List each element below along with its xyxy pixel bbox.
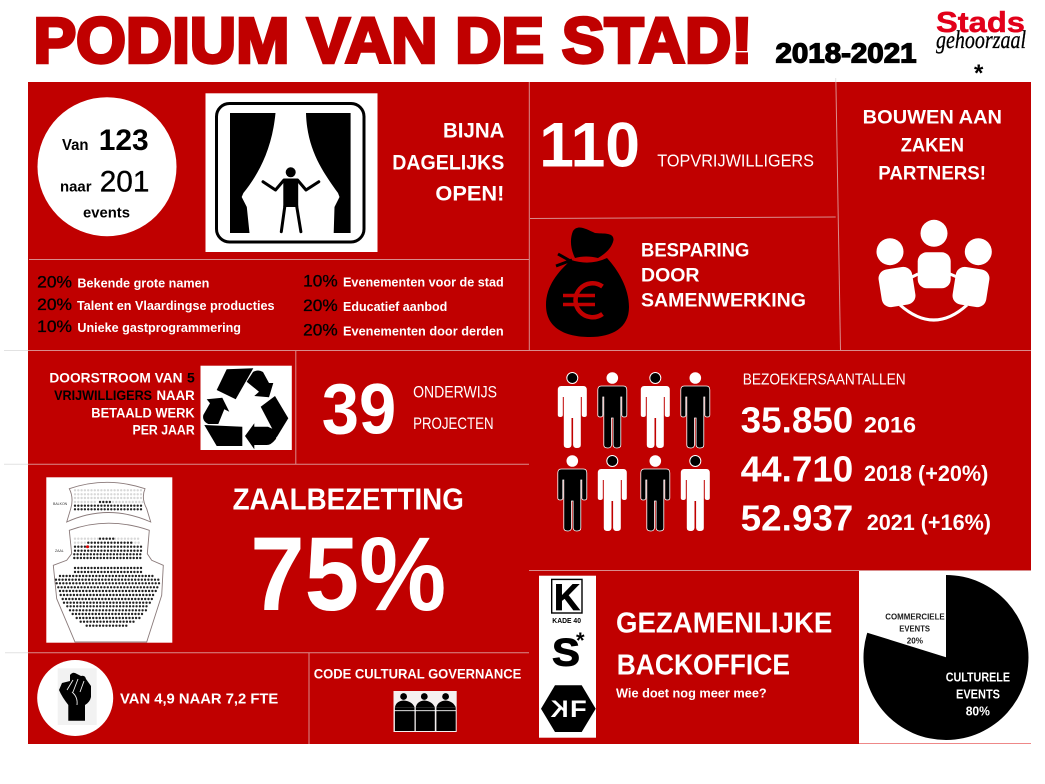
seating plan: BALKON [53, 502, 68, 506]
panel: pie chart events: 20% [907, 635, 923, 645]
panel: onderwijsprojecten: PROJECTEN [413, 414, 494, 433]
panel: programme mix: Educatief aanbod [343, 300, 447, 314]
panel: gezamenlijke backoffice: GEZAMENLIJKE [616, 608, 832, 640]
partner logos: K [550, 696, 568, 723]
partner logos: S [552, 631, 580, 674]
panel: zaalbezetting: ZAALBEZETTING [233, 481, 464, 516]
seating plan [46, 477, 172, 643]
events circle: naar [60, 179, 92, 196]
panel: besparing door samenwerking: SAMENWERKING [641, 290, 806, 312]
panel: onderwijsprojecten: ONDERWIJS [413, 382, 497, 401]
logo: Stadsgehoorzaal: Stads [936, 7, 1025, 39]
partner logos: F [570, 696, 587, 723]
panel: doorstroom vrijwilligers: VRIJWILLIGERS [54, 387, 152, 403]
panel: bezoekersaantallen: 44.710 [741, 449, 853, 490]
panel: doorstroom vrijwilligers: PER JAAR [132, 422, 195, 438]
partner logos [539, 576, 596, 738]
icon: people around a table [876, 220, 992, 320]
icon: recycling arrows [200, 366, 292, 450]
panel: programme mix: Bekende grote namen [77, 276, 209, 290]
panel: onderwijsprojecten: 39 [322, 370, 396, 449]
panel: bouwen aan zakenpartners [836, 82, 1031, 350]
panel: bouwen aan zakenpartners: BOUWEN AAN [863, 106, 1002, 128]
heading: bijna dagelijks open: DAGELIJKS [392, 151, 504, 174]
panel: programme mix: 20% [37, 295, 72, 314]
panel: programme mix: 20% [37, 272, 72, 291]
panel: pie chart events: EVENTS [956, 688, 1000, 702]
panel: pie chart events: EVENTS [899, 623, 930, 633]
panel: bezoekersaantallen: 2021 (+16%) [867, 510, 991, 535]
panel: programme mix: Talent en Vlaardingse producties [77, 299, 275, 313]
panel: code cultural governance [309, 653, 529, 744]
panel: bezoekersaantallen: 52.937 [741, 498, 853, 539]
events circle: 123 [99, 124, 149, 157]
title: PODIUM VAN DE STAD! [34, 4, 752, 76]
panel: events and opening [28, 82, 529, 259]
panel: programme mix: 10% [303, 272, 338, 291]
panel: topvrijwilligers: 110 [539, 111, 640, 181]
panel: gezamenlijke backoffice: BACKOFFICE [617, 649, 790, 681]
panel: pie chart events: COMMERCIELE [885, 611, 945, 621]
events circle: 201 [100, 166, 149, 199]
panel: programme mix: 20% [303, 296, 338, 315]
panel: pie chart events: CULTURELE [946, 671, 1010, 685]
seating plan: ZAAL [55, 549, 64, 553]
partner logos: K [554, 577, 580, 618]
panel: bezoekersaantallen: 2018 (+20%) [864, 461, 988, 486]
panel: doorstroom vrijwilligers: NAAR [156, 387, 195, 403]
panel: doorstroom vrijwilligers: DOORSTROOM VAN [49, 370, 183, 386]
panel: bezoekersaantallen: 2016 [864, 412, 916, 437]
panel: besparing door samenwerking: BESPARING [641, 240, 749, 262]
panel: doorstroom vrijwilligers [28, 350, 296, 464]
panel: bouwen aan zakenpartners: ZAKEN [901, 135, 964, 157]
panel: topvrijwilligers: TOPVRIJWILLIGERS [657, 151, 814, 171]
panel: pie chart events [859, 570, 1031, 744]
panel: fte: VAN 4,9 NAAR 7,2 FTE [120, 690, 278, 707]
panel: doorstroom vrijwilligers: 5 [187, 370, 195, 386]
panel: bouwen aan zakenpartners: PARTNERS! [878, 162, 986, 184]
panel: bezoekersaantallen: BEZOEKERSAANTALLEN [743, 371, 906, 388]
icon: stage curtains with performer [206, 93, 378, 252]
heading: bijna dagelijks open: BIJNA [443, 120, 504, 143]
panel: programme mix: 20% [303, 321, 338, 340]
panel: programme mix: Unieke gastprogrammering [77, 321, 241, 335]
logo: Stadsgehoorzaal: * [974, 60, 984, 87]
partner logos: * [576, 628, 585, 653]
icon: money bag with euro [546, 227, 629, 337]
icon: eight visitor figures [558, 372, 710, 531]
panel: programme mix: Evenementen door derden [343, 325, 504, 339]
logo: Stadsgehoorzaal [936, 7, 1026, 87]
panel: programme mix: 10% [37, 317, 72, 336]
panel: zaalbezetting [28, 464, 529, 653]
panel: fte [28, 653, 309, 744]
panel: zaalbezetting: 75% [250, 516, 446, 633]
partner logos: KADE 40 [552, 618, 581, 625]
heading: bijna dagelijks open: OPEN! [435, 183, 504, 206]
panel: besparing door samenwerking [529, 218, 838, 350]
icon: board members at desks [394, 691, 457, 732]
panel: besparing door samenwerking: DOOR [641, 265, 700, 287]
events circle: events [83, 204, 130, 221]
panel: topvrijwilligers [529, 82, 836, 218]
panel: doorstroom vrijwilligers: BETAALD WERK [91, 405, 195, 421]
panel: onderwijsprojecten [296, 350, 529, 464]
heading: bijna dagelijks open [392, 120, 504, 206]
panel: gezamenlijke backoffice [529, 570, 859, 744]
panel: bezoekersaantallen [529, 350, 1031, 570]
panel: pie chart events: 80% [966, 704, 990, 718]
period 2018-2021: 2018-2021 [776, 38, 916, 68]
panel: programme mix: Evenementen voor de stad [343, 276, 504, 290]
events circle [38, 97, 176, 236]
panel: programme mix [28, 259, 529, 350]
icon: raised fist [37, 660, 113, 736]
events circle: Van [62, 137, 88, 154]
panel: code cultural governance: CODE CULTURAL GOVERNANCE [314, 665, 521, 681]
panel: gezamenlijke backoffice: Wie doet nog meer mee? [616, 686, 767, 701]
panel: bezoekersaantallen: 35.850 [741, 400, 853, 441]
